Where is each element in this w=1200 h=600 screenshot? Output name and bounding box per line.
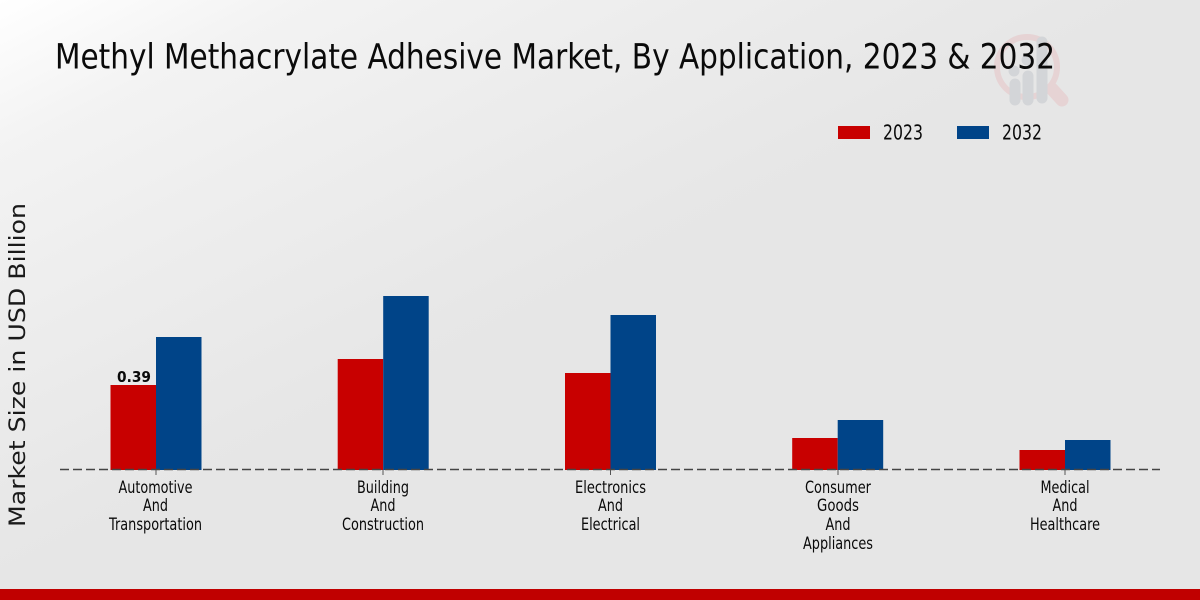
category label: Automotive And Transportation: Transportation <box>108 515 202 534</box>
bars: Electronics And Electrical <box>565 315 656 470</box>
category label: Building And Construction: And <box>370 496 396 515</box>
category label: Consumer Goods And Appliances: Goods <box>817 496 859 515</box>
bars: Building And Construction <box>338 296 429 470</box>
icon: watermark magnifier logo <box>997 37 1062 100</box>
category label: Consumer Goods And Appliances: And <box>826 515 850 534</box>
category label: Consumer Goods And Appliances: Appliances <box>803 534 873 553</box>
category label: Consumer Goods And Appliances <box>803 478 873 553</box>
bars: Consumer Goods And Appliances <box>792 420 883 470</box>
category label: Electronics And Electrical: Electrical <box>581 515 640 534</box>
category label: Building And Construction: Building <box>357 478 409 497</box>
category label: Medical And Healthcare: And <box>1052 496 1078 515</box>
legend item: 2023 <box>838 120 923 144</box>
category label: Building And Construction: Construction <box>342 515 424 534</box>
category label: Automotive And Transportation <box>108 478 202 534</box>
category label: Consumer Goods And Appliances: Consumer <box>805 478 871 497</box>
category label: Electronics And Electrical: And <box>598 496 623 515</box>
category label: Electronics And Electrical: Electronics <box>575 478 646 497</box>
bar chart <box>60 296 1160 475</box>
legend item: 2023: 2023 <box>883 120 923 144</box>
category label: Building And Construction <box>342 478 424 534</box>
category label: Medical And Healthcare <box>1030 478 1100 534</box>
legend item: 2032: 2032 <box>1002 120 1042 144</box>
category label: Electronics And Electrical <box>575 478 646 534</box>
legend <box>838 120 1042 144</box>
bars: Automotive And Transportation <box>110 337 202 470</box>
title: Methyl Methacrylate Adhesive Market, By Application, 2023 & 2032 <box>55 38 1055 78</box>
category label: Automotive And Transportation: And <box>143 496 168 515</box>
footer bar <box>0 589 1200 600</box>
legend item: 2032 <box>957 120 1042 144</box>
bars: Medical And Healthcare <box>1020 440 1110 470</box>
category label: Automotive And Transportation: Automotive <box>118 478 192 497</box>
y axis label: Market Size in USD Billion <box>5 203 31 527</box>
data label: 0.39: 0.39 <box>117 368 151 386</box>
category label: Medical And Healthcare: Medical <box>1040 478 1090 497</box>
category label: Medical And Healthcare: Healthcare <box>1030 515 1100 534</box>
